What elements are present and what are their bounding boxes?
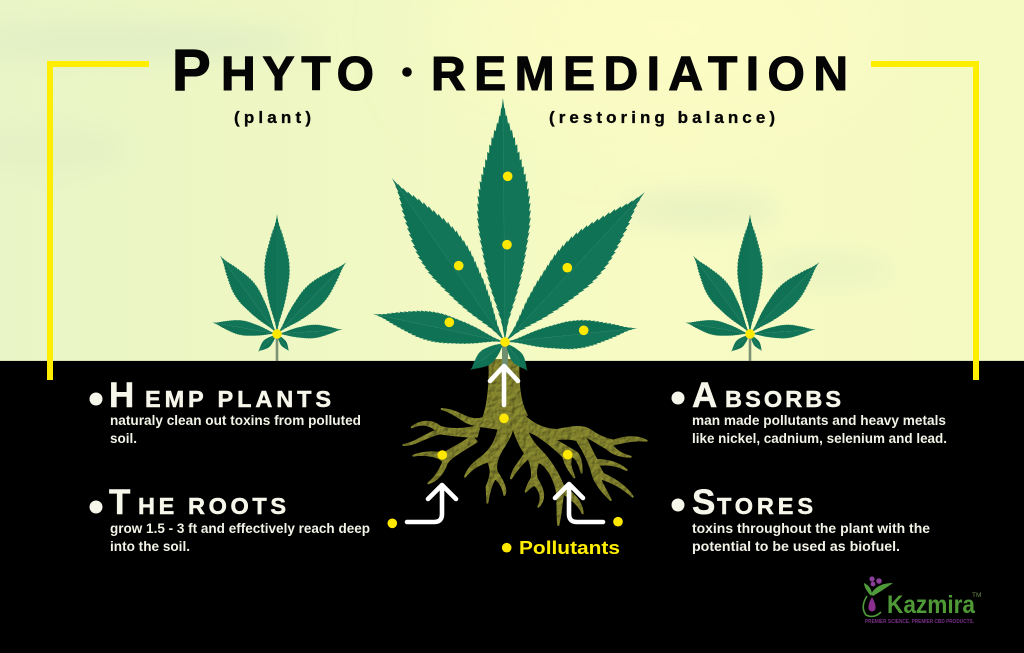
text block: the roots bbox=[90, 483, 370, 554]
text block: stores bbox=[672, 483, 930, 554]
pollutants legend: Pollutants bbox=[519, 538, 620, 558]
arrow: up the stem bbox=[490, 366, 518, 405]
text block: hemp plants: soil. bbox=[110, 430, 137, 446]
text block: hemp plants: H bbox=[109, 376, 134, 415]
logo: Kazmira: Kazmira bbox=[887, 591, 976, 619]
subtitle: restoring balance: (restoring balance) bbox=[549, 108, 775, 127]
logo: Kazmira: PREMIER SCIENCE. PREMIER CBD PRODUCTS. bbox=[865, 619, 975, 625]
text block: absorbs: A bbox=[692, 376, 717, 415]
text block: stores: TORES bbox=[717, 493, 813, 519]
soil background bbox=[0, 361, 1024, 653]
text block: absorbs: man made pollutants and heavy metals bbox=[692, 412, 946, 428]
sky background bbox=[0, 0, 1024, 361]
title: P bbox=[172, 38, 211, 103]
logo: Kazmira bbox=[863, 576, 981, 625]
text block: the roots: HE ROOTS bbox=[138, 493, 286, 519]
text block: hemp plants: naturaly clean out toxins from polluted bbox=[110, 412, 361, 428]
arrow: right root uptake bbox=[555, 484, 603, 522]
title bbox=[172, 38, 848, 103]
logo: Kazmira: TM bbox=[972, 592, 981, 599]
roots bbox=[403, 360, 647, 525]
right small hemp plant bbox=[683, 214, 828, 361]
text block: the roots: grow 1.5 - 3 ft and effectively reach deep bbox=[110, 520, 370, 536]
text block: hemp plants: EMP PLANTS bbox=[145, 386, 331, 412]
stem bbox=[502, 342, 508, 366]
text block: hemp plants bbox=[90, 376, 361, 446]
arrow: left root uptake bbox=[407, 485, 456, 522]
subtitle: plant: (plant) bbox=[234, 108, 311, 127]
left yellow bracket bbox=[50, 64, 149, 380]
text block: the roots: into the soil. bbox=[110, 538, 190, 554]
large hemp plant bbox=[370, 98, 662, 377]
text block: the roots: T bbox=[109, 483, 130, 522]
left small hemp plant bbox=[210, 214, 355, 361]
text block: absorbs: like nickel, cadnium, selenium and lead. bbox=[692, 430, 947, 446]
text block: absorbs bbox=[672, 376, 947, 446]
text block: stores: S bbox=[692, 483, 715, 522]
right yellow bracket bbox=[871, 64, 976, 380]
title: HYTO bbox=[221, 48, 374, 101]
yellow pollutant dots bbox=[272, 172, 755, 528]
text block: stores: potential to be used as biofuel. bbox=[692, 538, 900, 554]
text block: stores: toxins throughout the plant with the bbox=[692, 520, 930, 536]
title: REMEDIATION bbox=[431, 48, 848, 101]
text block: absorbs: BSORBS bbox=[725, 386, 841, 412]
